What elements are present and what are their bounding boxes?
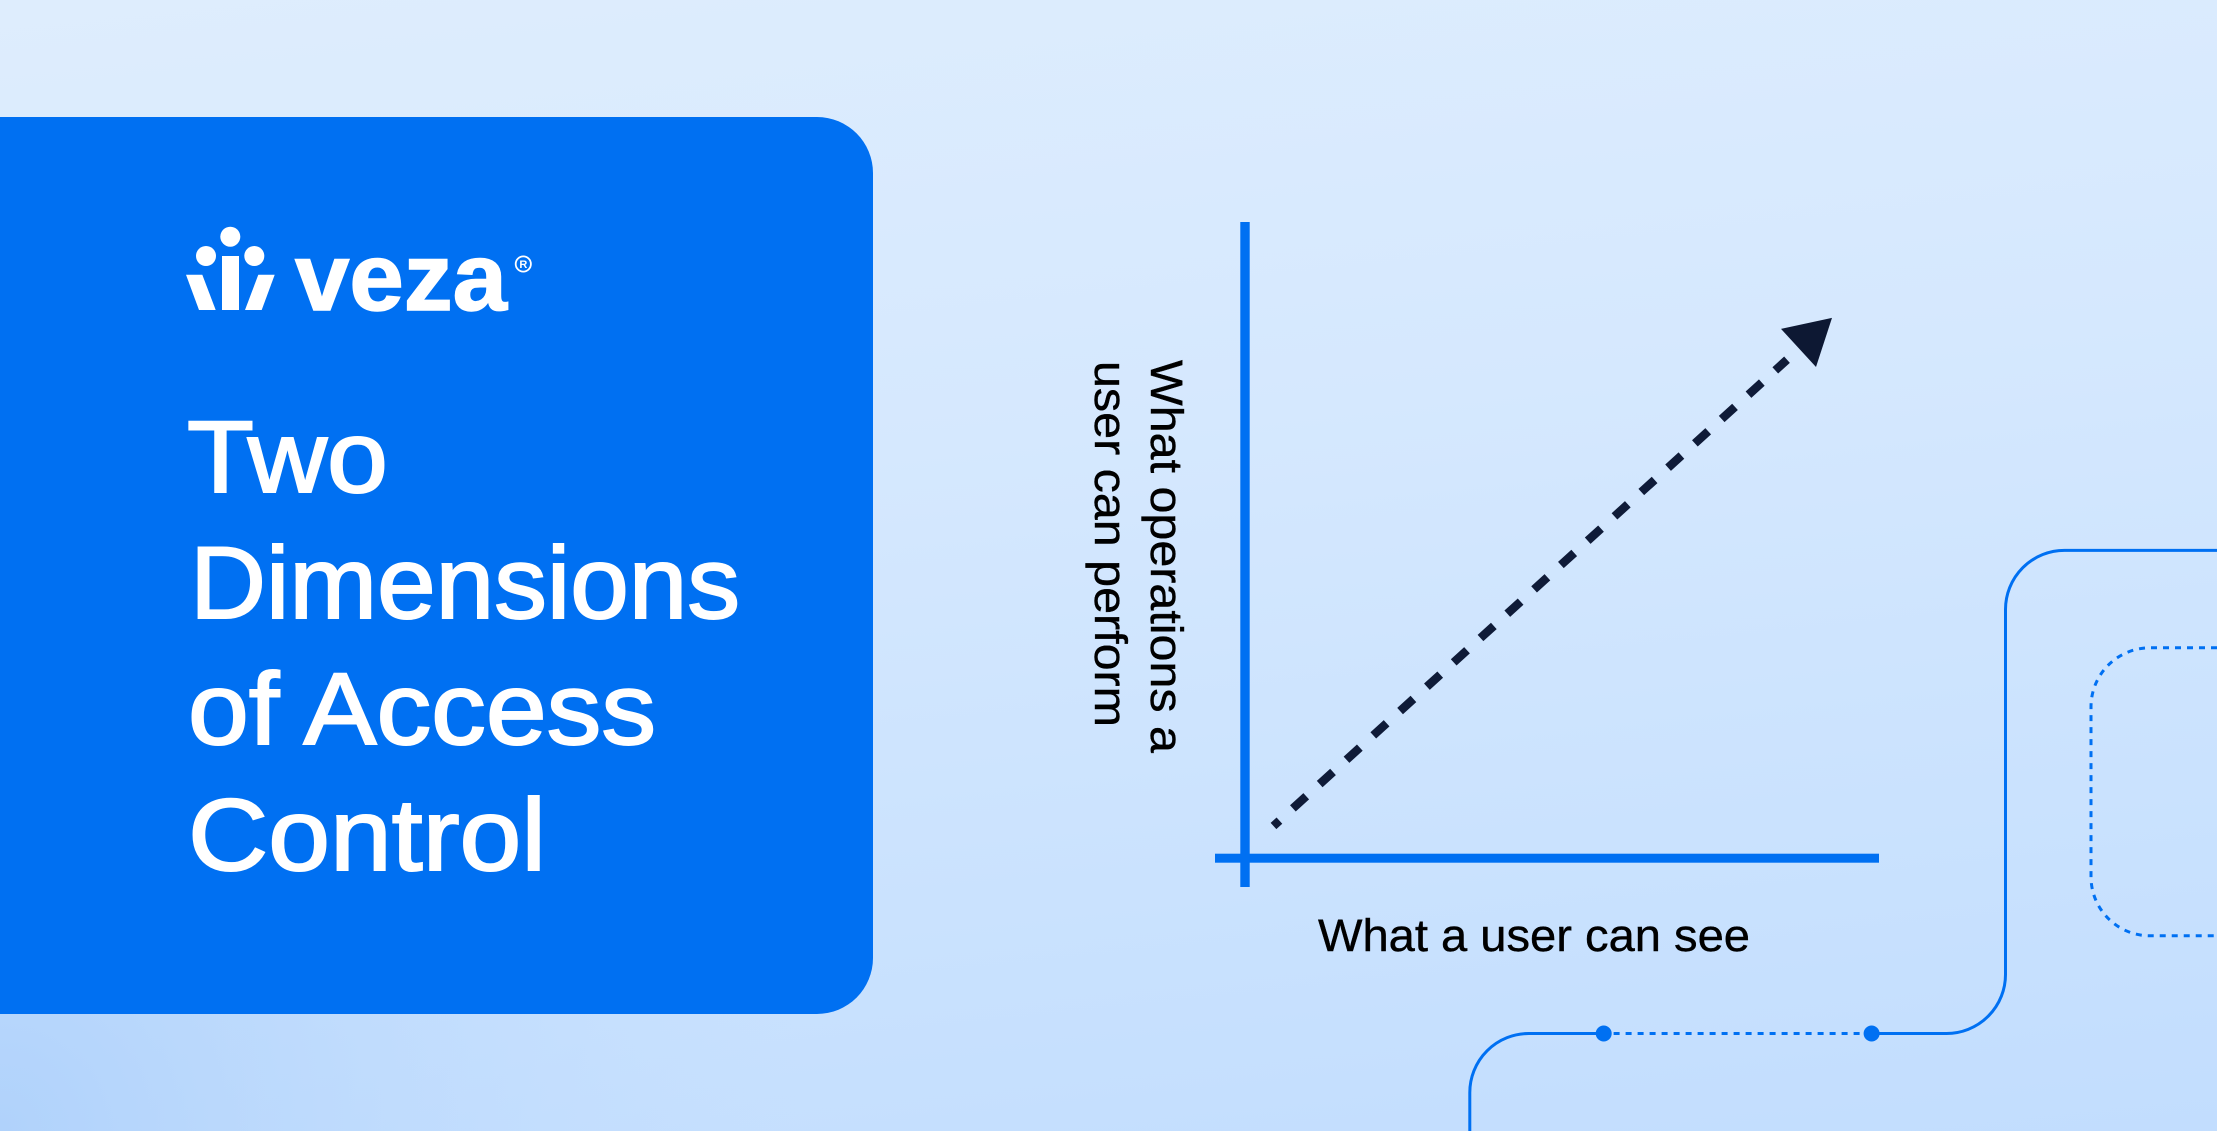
title: Control <box>188 778 546 892</box>
title: Two <box>187 400 388 514</box>
y-axis label <box>1085 360 1192 754</box>
chart: two-axis access diagram <box>1085 222 1879 961</box>
vertical axis <box>1240 222 1250 887</box>
title <box>187 400 740 892</box>
dotted rounded box <box>2091 648 2217 936</box>
panel: blue title card <box>0 117 873 1014</box>
x-axis label: What a user can see <box>1318 910 1750 961</box>
horizontal axis <box>1215 854 1879 863</box>
icon: registered mark <box>516 256 531 272</box>
icon: veza logo mark <box>186 227 275 310</box>
title: of Access <box>188 652 656 766</box>
icon: registered mark: R <box>519 259 527 271</box>
y-axis label: user can perform <box>1085 361 1136 727</box>
y-axis label: What operations a <box>1141 360 1192 754</box>
dashed diagonal arrow <box>1274 318 1832 826</box>
decorative connector path with nodes <box>1470 550 2217 1131</box>
logo wordmark: veza: veza <box>295 224 508 331</box>
title: Dimensions <box>190 526 740 640</box>
